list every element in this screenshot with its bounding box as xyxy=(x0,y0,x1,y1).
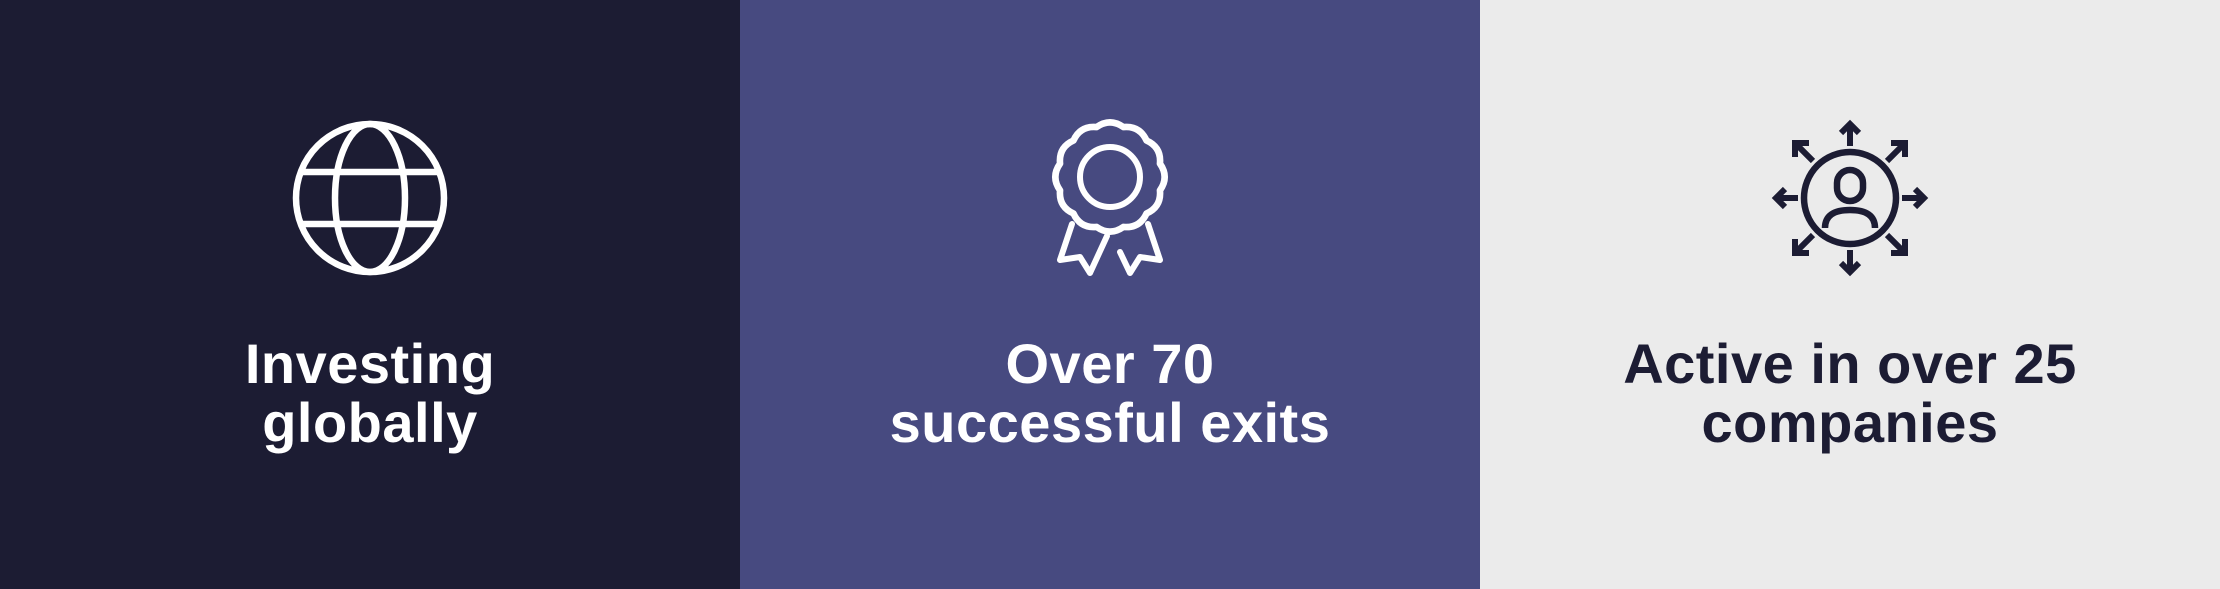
panel: companies xyxy=(1480,0,2220,589)
text: companies: companies xyxy=(1701,391,1999,454)
panel: exits xyxy=(740,0,1480,589)
icon: globe xyxy=(292,120,448,276)
text: companies xyxy=(1623,332,2077,454)
text: exits: Over 70 xyxy=(1006,332,1214,395)
text: investing globally: Investing xyxy=(245,332,495,395)
text: exits xyxy=(890,332,1330,454)
icon: award medal xyxy=(1052,119,1168,276)
text: investing globally: globally xyxy=(262,391,478,454)
text: companies: Active in over 25 xyxy=(1623,332,2077,395)
icon: person with arrows xyxy=(1772,120,1928,276)
text: exits: successful exits xyxy=(890,391,1330,454)
text: investing globally xyxy=(245,332,495,454)
panel: investing globally xyxy=(0,0,740,589)
